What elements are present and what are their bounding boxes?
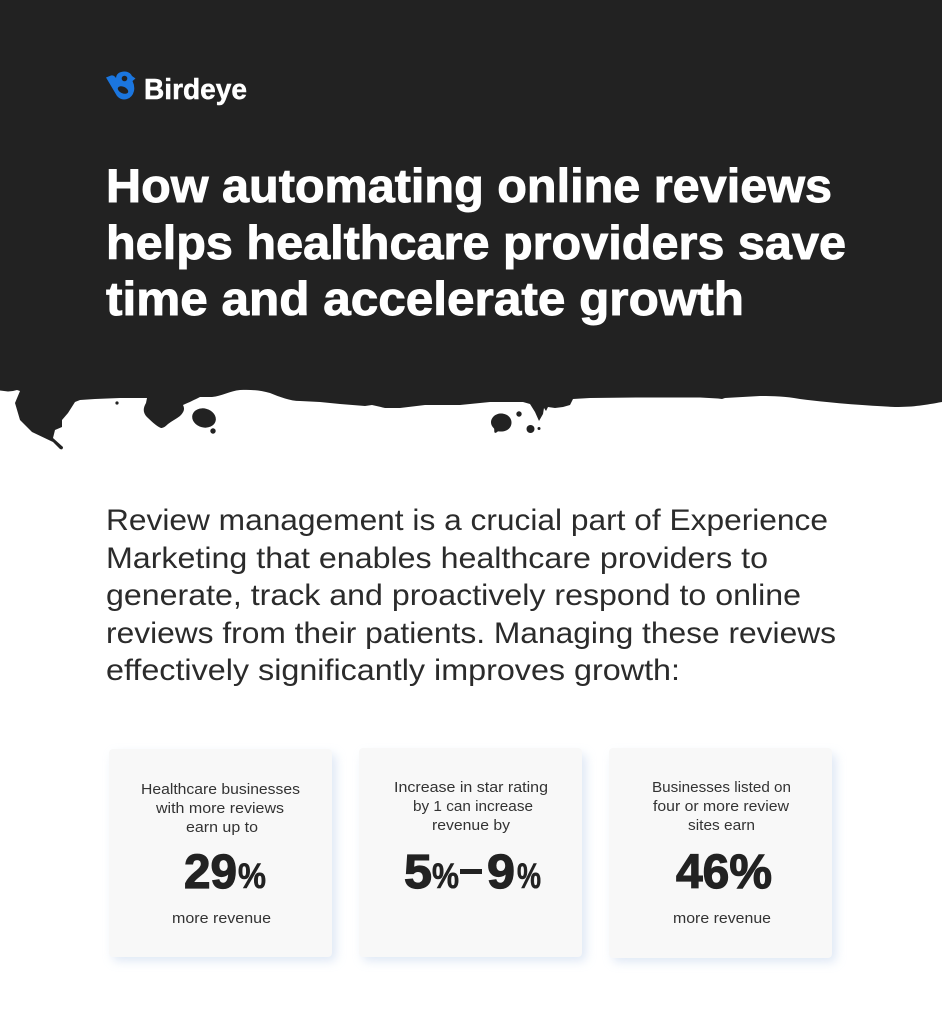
card description: sites earn (688, 817, 755, 834)
intro paragraph (106, 504, 836, 687)
logo wordmark: Birdeye (144, 74, 247, 106)
stat value 5%-9%: 9 (487, 846, 515, 899)
intro paragraph: Review management is a crucial part of Experience (106, 504, 828, 537)
card description: Businesses listed on (652, 779, 791, 796)
title (106, 159, 846, 325)
stat value 46%: 46% (676, 846, 772, 899)
title: helps healthcare providers save (106, 216, 846, 269)
card description: four or more review (653, 798, 789, 815)
stat value 5%-9%: % (517, 857, 541, 896)
stat value 29%: 29 (184, 846, 237, 899)
card description (652, 779, 791, 834)
ink splatter: right drops (491, 411, 540, 433)
stat value 29% (184, 846, 266, 899)
intro paragraph: effectively significantly improves growth: (106, 654, 680, 687)
title: time and accelerate growth (106, 272, 744, 325)
card description: Increase in star rating (394, 779, 548, 796)
panel: stat card 29% (109, 749, 336, 961)
panel: stat card 46% (609, 748, 836, 962)
stat value 29%: % (238, 857, 266, 896)
card description: revenue by (432, 817, 511, 834)
card description: by 1 can increase (413, 798, 533, 815)
ink splatter: left drops (115, 401, 218, 434)
panel: dark header with ink edge (0, 0, 942, 449)
stat value 5%-9%: 5 (404, 846, 432, 899)
card description: Healthcare businesses (141, 781, 300, 798)
intro paragraph: generate, track and proactively respond to online (106, 579, 801, 612)
card description: earn up to (186, 819, 258, 836)
card footer: more revenue (172, 910, 271, 927)
intro paragraph: Marketing that enables healthcare providers to (106, 542, 768, 575)
logo: Birdeye (106, 72, 247, 106)
panel: stat card 5%-9% (359, 748, 586, 961)
stat value 5%-9%: % (432, 857, 459, 896)
card description (394, 779, 548, 834)
card description (141, 781, 300, 836)
stat value 5%-9% (404, 846, 541, 899)
card description: with more reviews (155, 800, 284, 817)
intro paragraph: reviews from their patients. Managing these reviews (106, 617, 836, 650)
title: How automating online reviews (106, 159, 832, 212)
icon: blue bird (106, 72, 136, 100)
card footer: more revenue (673, 910, 771, 927)
